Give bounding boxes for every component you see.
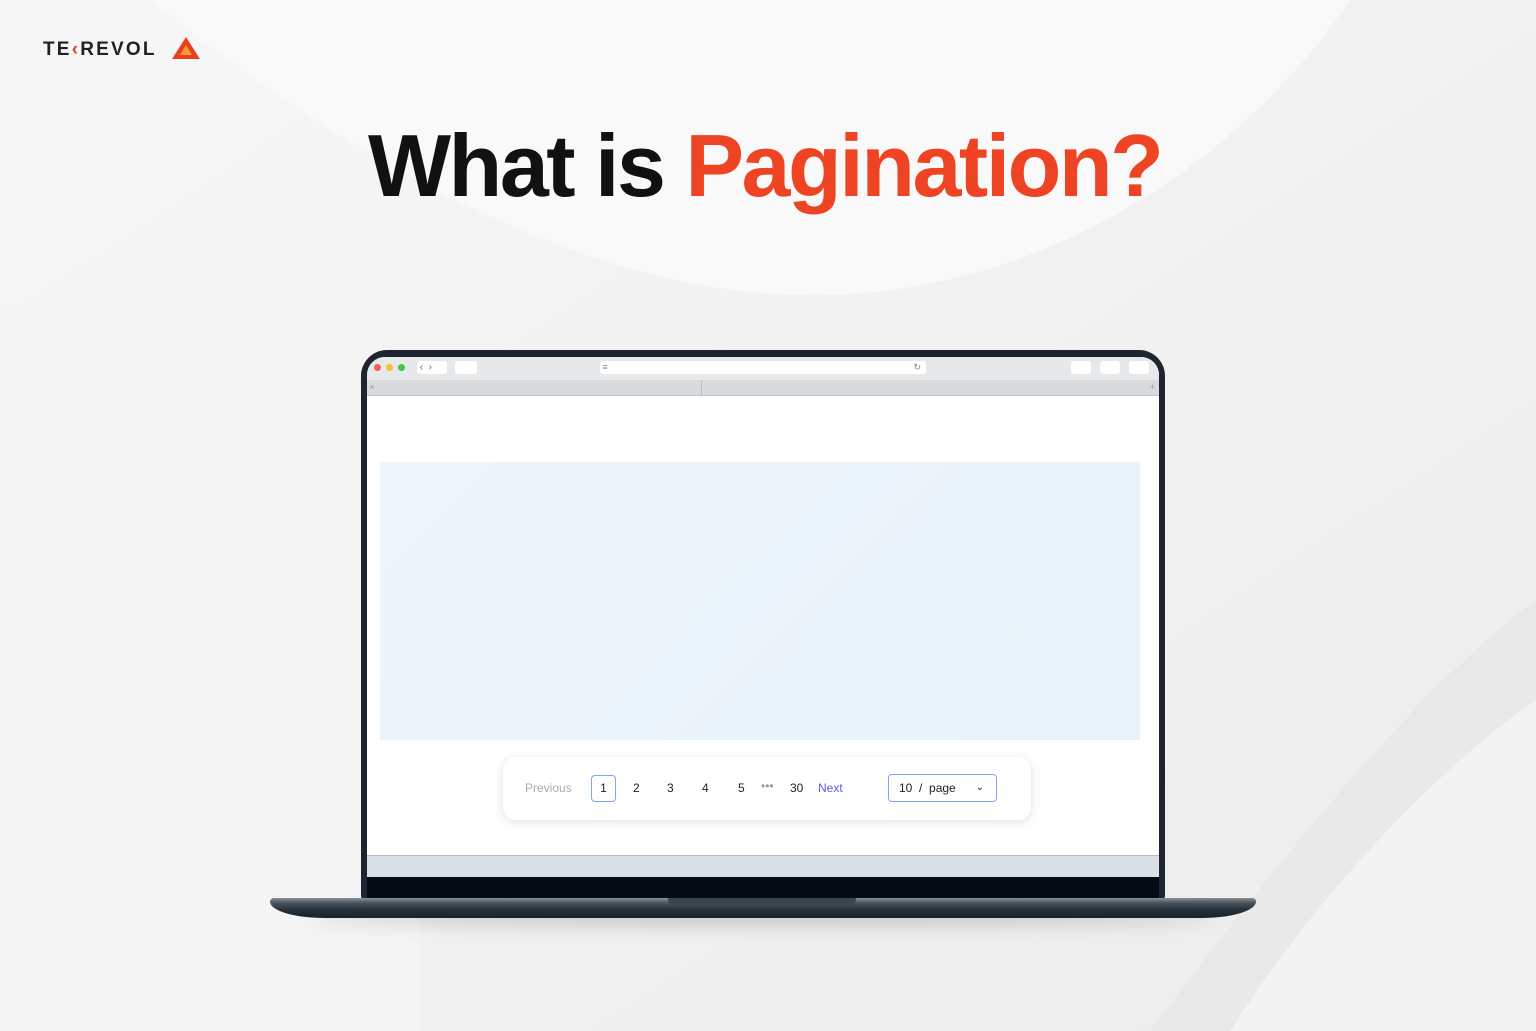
pagination: ⌄ [976,782,984,793]
logo [43,37,200,60]
pagination [525,774,997,802]
title: What is Pagination? [368,116,1161,215]
pagination: 1 [600,781,607,795]
browser toolbar: ‹ › [420,362,432,373]
tab bar: + [1150,382,1155,392]
laptop [270,350,1256,932]
bottom gray bar [367,855,1159,878]
browser toolbar: ↻ [913,362,921,372]
pagination: 10 / page [899,781,956,795]
pagination: 5 [738,781,745,795]
pagination: 2 [633,781,640,795]
screen bezel [361,350,1165,900]
pagination card [503,757,1031,820]
pagination: 30 [790,781,803,795]
pagination: 3 [667,781,674,795]
browser toolbar [367,357,1159,380]
tab bar [367,380,1159,396]
pagination: Next [818,781,843,795]
logo: TE‹REVOL [43,39,157,60]
black chin [367,877,1159,899]
base [270,898,1256,918]
pagination: ••• [761,779,774,793]
pagination: Previous [525,781,572,795]
laptop shadow [310,905,1216,917]
tab bar: × [370,382,375,392]
browser toolbar: ≡ [602,362,608,372]
pagination: 4 [702,781,709,795]
content placeholder [380,462,1140,740]
